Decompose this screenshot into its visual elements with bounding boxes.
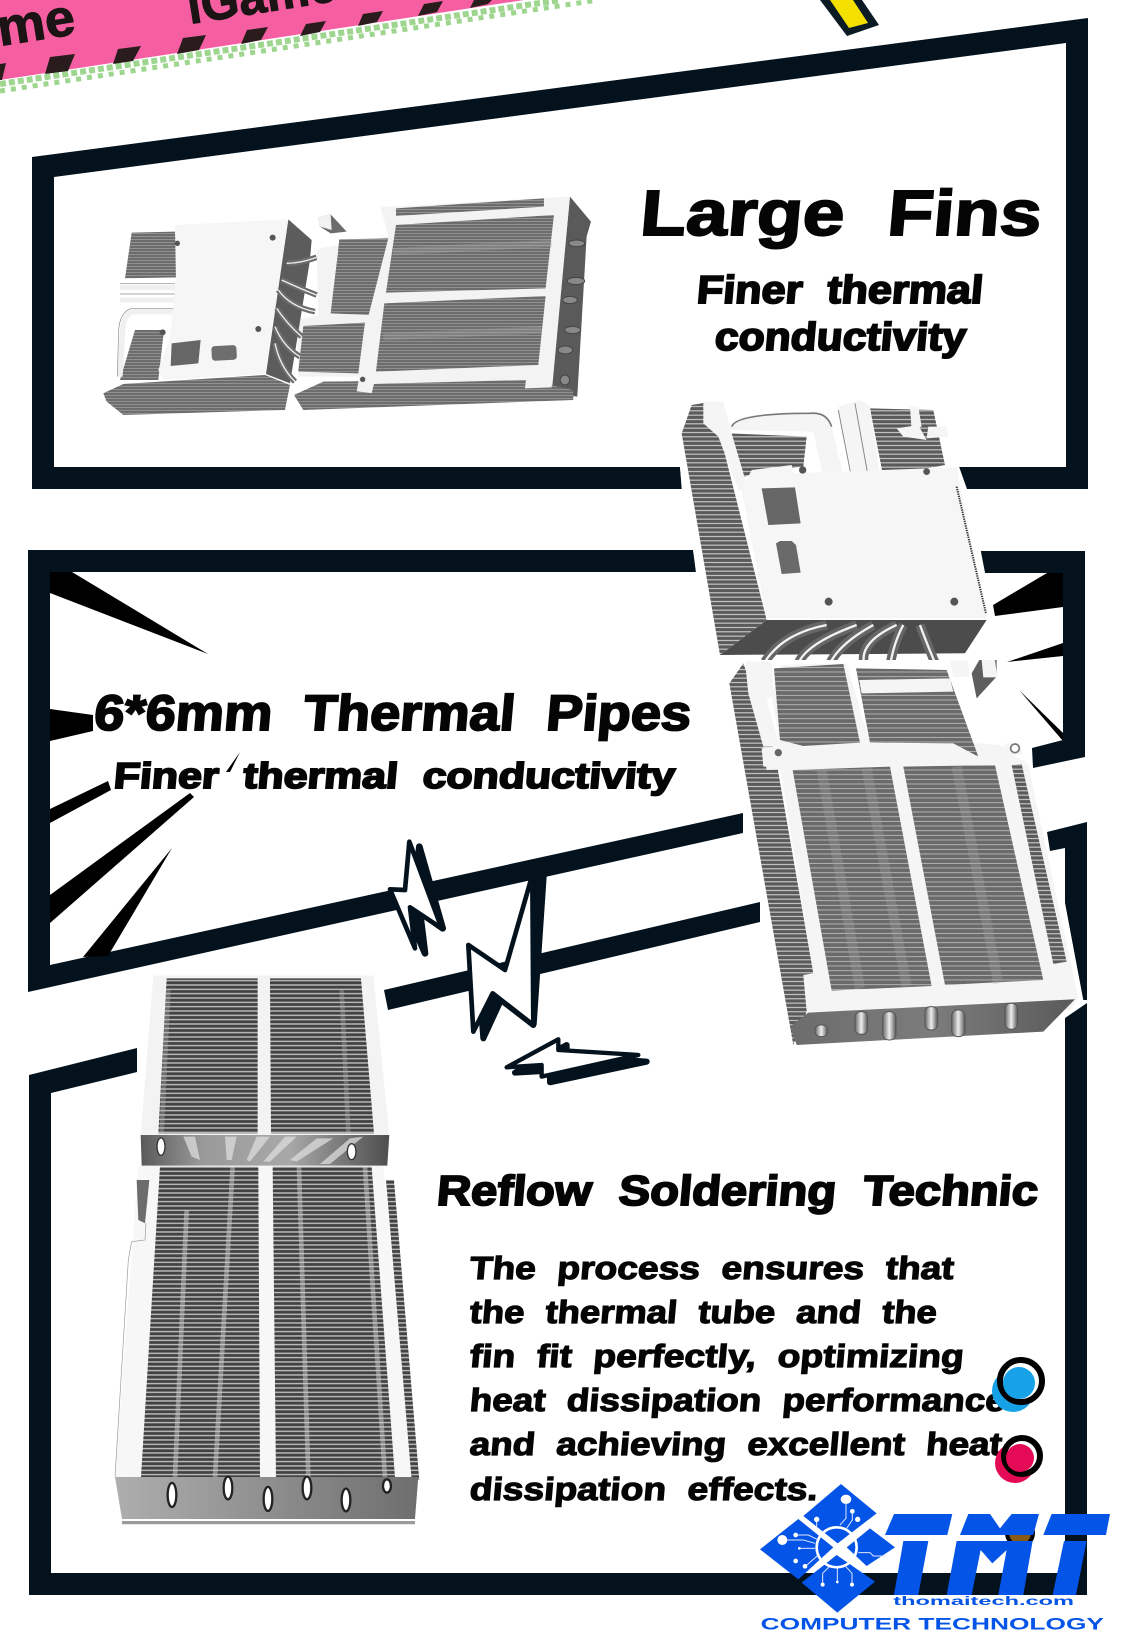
lower fin panel [376,296,546,372]
screw holes [775,749,782,756]
heading: thermal pipes: 6*6mm Thermal Pipes [92,685,694,741]
main top bar [763,743,1025,770]
pink banner [0,0,598,91]
lower section frame [115,1166,413,1477]
right unit white frame [297,197,570,393]
tube ends [815,1003,1018,1040]
bracket [950,661,969,677]
fin highlights [383,243,552,337]
logo letters TMT [885,1514,1110,1595]
left side fins [682,402,767,655]
upper section frame [141,976,389,1135]
right thin fins [386,1180,419,1480]
body text: reflow soldering [468,1250,1008,1507]
lower fins left [141,1167,260,1477]
tube ends [168,1477,391,1511]
small fin panels [331,238,388,315]
left unit fins [125,232,178,278]
left unit light pipes [120,287,175,377]
white crossbar [859,678,953,693]
bolt one [390,842,443,953]
logo: TMT computer technology [760,1484,1110,1633]
band: reflow frame middle [384,902,760,1010]
upper fin panel [386,215,554,293]
body text: reflow soldering: The process ensures that [468,1250,956,1286]
plate cut-outs [762,487,801,525]
tube ends [558,240,585,385]
right unit bottom fins [294,379,573,410]
body text: reflow soldering: dissipation effects. [468,1471,820,1507]
bolt two [468,873,547,1038]
left side fins [729,663,813,1045]
screw holes [160,235,365,382]
main fin panels [793,767,932,991]
right fin strip [1012,764,1067,964]
main plate [742,465,987,618]
subheading: finer thermal conductivity: Finer thermal conductivity [112,755,677,796]
bottom dark face [720,620,987,655]
body text: reflow soldering: the thermal tube and the [468,1294,939,1330]
heading: reflow soldering: Reflow Soldering Technic [435,1167,1040,1214]
panel frame: thermal pipes left [28,550,743,992]
left unit bottom fins [103,375,290,415]
icon: lightning bolts [390,842,647,1082]
shiny soldered block [141,1135,389,1166]
panel frame: thermal pipes right [980,551,1085,768]
heading: large fins: Large Fins [638,177,1045,249]
white frame base [745,662,780,747]
clip block [318,214,347,233]
yellow arrow tip [820,0,879,36]
band: reflow frame right [1047,822,1087,1000]
body text: reflow soldering: and achieving excellent heat [468,1426,1004,1462]
front face [115,1477,418,1519]
top-left fins [728,433,807,480]
upper fins left [158,978,258,1133]
panel frame: large fins [32,18,1088,489]
tube streaks [822,767,998,988]
comic speed rays [50,572,1063,957]
lower fins right [273,1167,395,1477]
white halo [720,660,1083,1048]
upper fins right [270,978,374,1133]
left unit side face [266,219,312,383]
top fin strip [396,198,544,216]
subheading: finer thermal: Finer thermal [695,269,985,312]
screw holes [799,466,958,606]
left unit plate [158,219,288,380]
heat pipes [765,625,937,667]
logo tagline: COMPUTER TECHNOLOGY [761,1614,1104,1633]
subheading: conductivity: conductivity [713,316,968,359]
upper fin panels [774,664,860,746]
heatsink: large fins, horizontal view [103,197,591,415]
panel frame: reflow soldering [29,1003,1087,1595]
body text: reflow soldering: fin fit perfectly, optimizing [468,1338,966,1374]
front face [790,999,1075,1045]
bolt three [507,1039,647,1082]
plate cut-outs [171,340,201,366]
right unit side face [552,197,591,397]
body text: reflow soldering: heat dissipation performance [468,1382,1008,1418]
icon: brown circle [1007,1520,1033,1546]
top-right fins [870,408,945,477]
heatsink: top-down view [115,976,419,1524]
white halo [677,390,985,658]
side edge [957,487,986,613]
connecting heat pipes [275,257,317,382]
heatsink: exploded vertical view, lower unit [720,660,1083,1048]
heatsink: exploded vertical view, upper unit [677,390,987,667]
white pipes and brackets [703,400,948,490]
icon: red circle [995,1438,1040,1483]
logo url: thomaitech.com [893,1594,1074,1608]
left notch [137,1180,149,1223]
logo diamond [760,1484,895,1613]
icon: blue circle [992,1360,1042,1412]
